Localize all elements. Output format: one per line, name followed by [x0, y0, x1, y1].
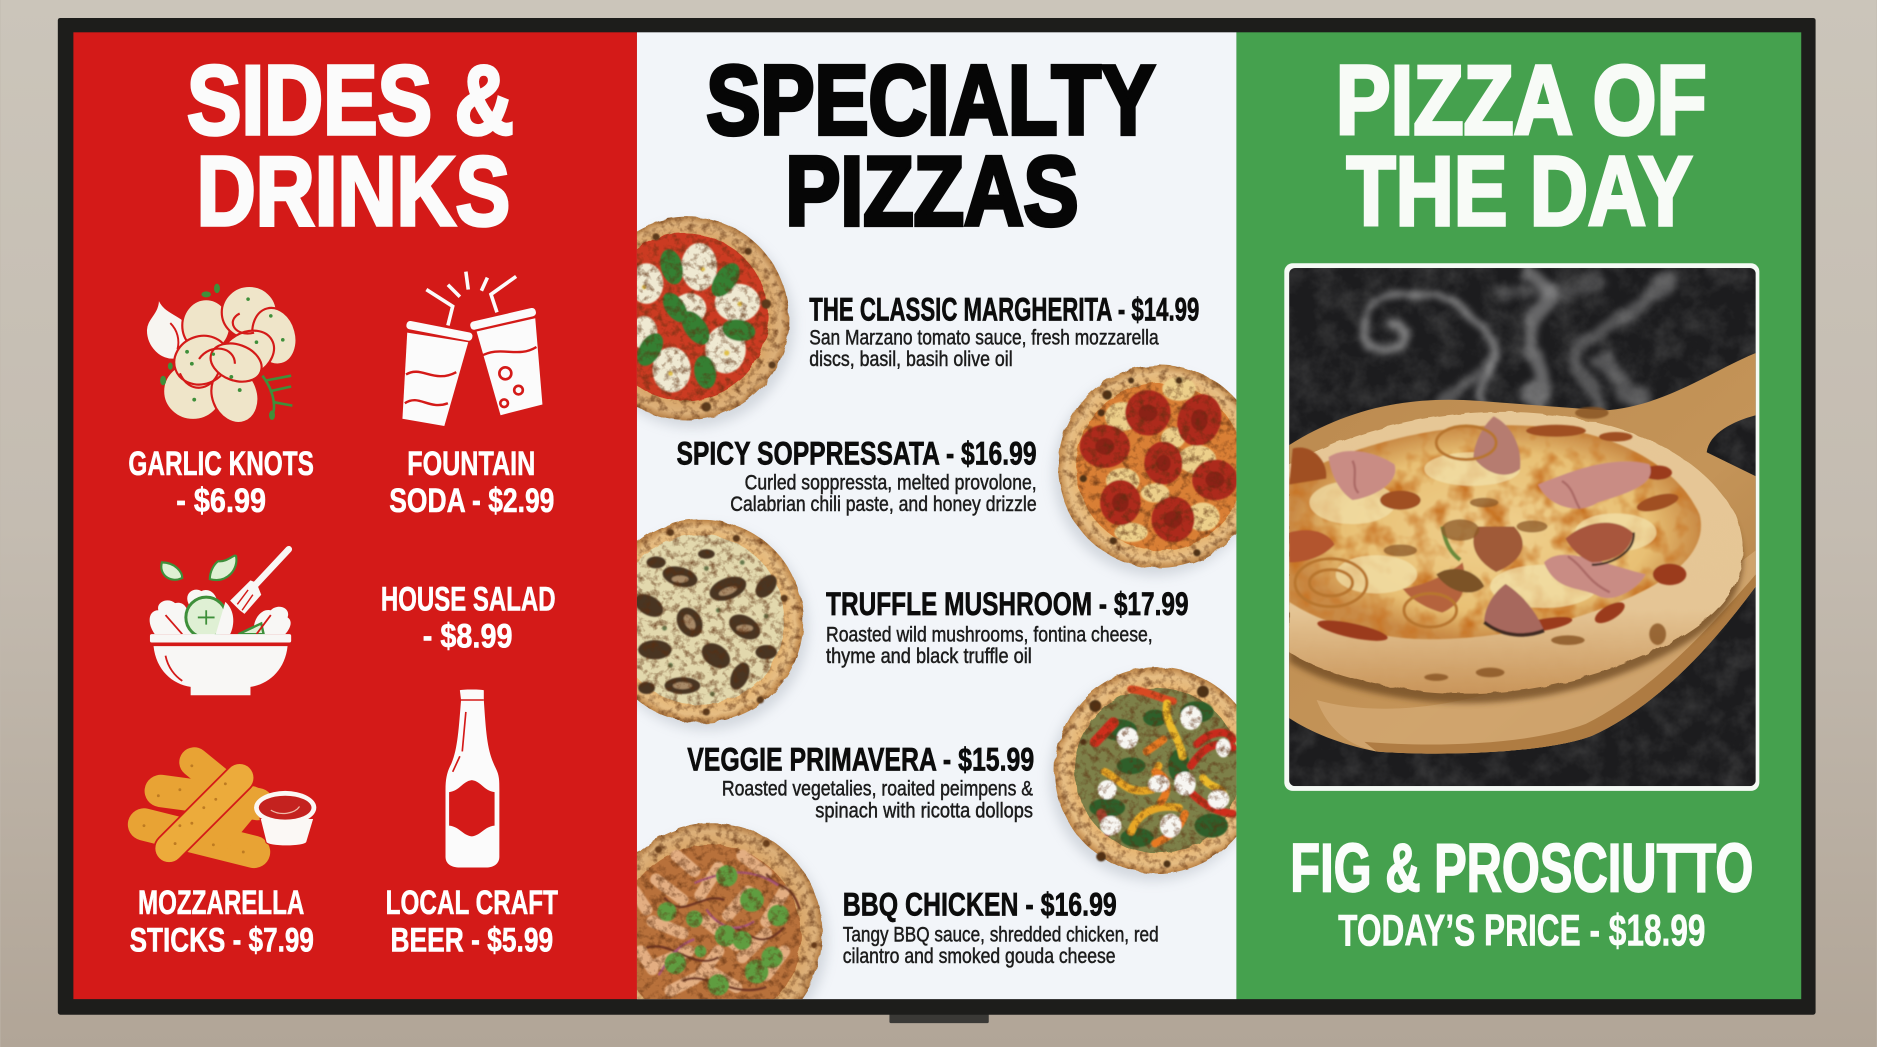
heading: sides and drinks: SIDES & [187, 45, 514, 155]
cheese and toppings [1289, 416, 1701, 645]
pizza: veggie primavera [1050, 668, 1260, 881]
icon: fountain soda cups [402, 272, 542, 426]
shadow under pizza [1289, 494, 1746, 707]
menu item: bbq chicken [843, 886, 1159, 968]
menu item: truffle mushroom: thyme and black truffle oil [826, 645, 1032, 668]
label: mozzarella sticks: STICKS - $7.99 [130, 921, 314, 959]
heading: sides and drinks [187, 45, 514, 246]
pizza: margherita [636, 216, 797, 431]
label: fountain soda: SODA - $2.99 [389, 482, 554, 520]
pizza: bbq chicken [636, 822, 831, 1000]
menu item: margherita: discs, basil, basih olive oil [809, 348, 1013, 371]
menu item: bbq chicken: BBQ CHICKEN - $16.99 [843, 886, 1117, 922]
caramelised onions [1295, 426, 1496, 627]
menu item: soppressata: SPICY SOPPRESSATA - $16.99 [676, 435, 1037, 471]
label: garlic knots: - $6.99 [176, 482, 266, 520]
label: mozzarella sticks [130, 884, 314, 959]
menu item: veggie primavera: spinach with ricotta dollops [815, 799, 1033, 822]
label: local craft beer: BEER - $5.99 [390, 921, 553, 959]
icon: garlic knots [146, 284, 303, 430]
pizza crust [1289, 412, 1743, 694]
menu item: soppressata [676, 435, 1037, 516]
pizza images [586, 217, 1262, 1047]
menu item: bbq chicken: cilantro and smoked gouda cheese [843, 945, 1116, 968]
menu item: truffle mushroom: TRUFFLE MUSHROOM - $17.99 [826, 586, 1189, 622]
menu item: soppressata: Calabrian chili paste, and honey drizzle [730, 493, 1037, 516]
label: garlic knots: GARLIC KNOTS [128, 445, 314, 483]
menu item: truffle mushroom: Roasted wild mushrooms, fontina cheese, [826, 623, 1153, 646]
photo: fig and prosciutto pizza [1289, 268, 1756, 786]
menu item: margherita [809, 292, 1199, 371]
label: fountain soda: FOUNTAIN [407, 445, 535, 483]
heading: sides and drinks: DRINKS [197, 136, 510, 246]
label: garlic knots [128, 445, 314, 520]
menu item: veggie primavera [687, 742, 1034, 822]
photo frame [1284, 263, 1759, 791]
label: mozzarella sticks: MOZZARELLA [138, 884, 304, 922]
pizza: soppressata [1053, 365, 1262, 576]
pizza: truffle mushroom [636, 519, 812, 734]
mount tab under the screen [889, 1012, 989, 1023]
panel: specialty pizzas [636, 32, 1236, 1000]
heading: pizza of the day [1336, 45, 1707, 246]
label: local craft beer [386, 884, 558, 959]
icon: house salad bowl [150, 549, 291, 695]
panel: pizza of the day [1236, 32, 1801, 999]
icon: mozzarella sticks [143, 762, 316, 853]
menu item: soppressata: Curled soppressta, melted provolone, [745, 471, 1037, 494]
icon: craft beer bottle [446, 690, 499, 868]
figs [1289, 416, 1634, 635]
today's price: TODAY’S PRICE - $18.99 [1338, 906, 1706, 955]
wooden peel [1289, 353, 1756, 754]
heading: pizza of the day: THE DAY [1347, 136, 1692, 246]
menu item: margherita: San Marzano tomato sauce, fresh mozzarella [809, 327, 1159, 350]
menu item: veggie primavera: Roasted vegetalies, roaited peimpens & [722, 778, 1033, 801]
label: house salad [381, 580, 556, 655]
steam [1364, 270, 1676, 413]
menu item: veggie primavera: VEGGIE PRIMAVERA - $15.99 [687, 742, 1034, 778]
label: house salad: - $8.99 [423, 617, 513, 655]
heading: specialty pizzas: PIZZAS [785, 136, 1078, 246]
panel: sides and drinks [73, 32, 637, 999]
heading: pizza of the day: PIZZA OF [1336, 45, 1707, 155]
label: house salad: HOUSE SALAD [381, 580, 556, 618]
label: local craft beer: LOCAL CRAFT [386, 884, 558, 922]
heading: specialty pizzas [706, 45, 1155, 246]
menu item: margherita: THE CLASSIC MARGHERITA - $14.99 [809, 292, 1199, 328]
menu item: truffle mushroom [826, 586, 1189, 668]
menu item: bbq chicken: Tangy BBQ sauce, shredded chicken, red [843, 924, 1159, 947]
heading: specialty pizzas: SPECIALTY [706, 45, 1155, 155]
label: fountain soda [389, 445, 554, 520]
